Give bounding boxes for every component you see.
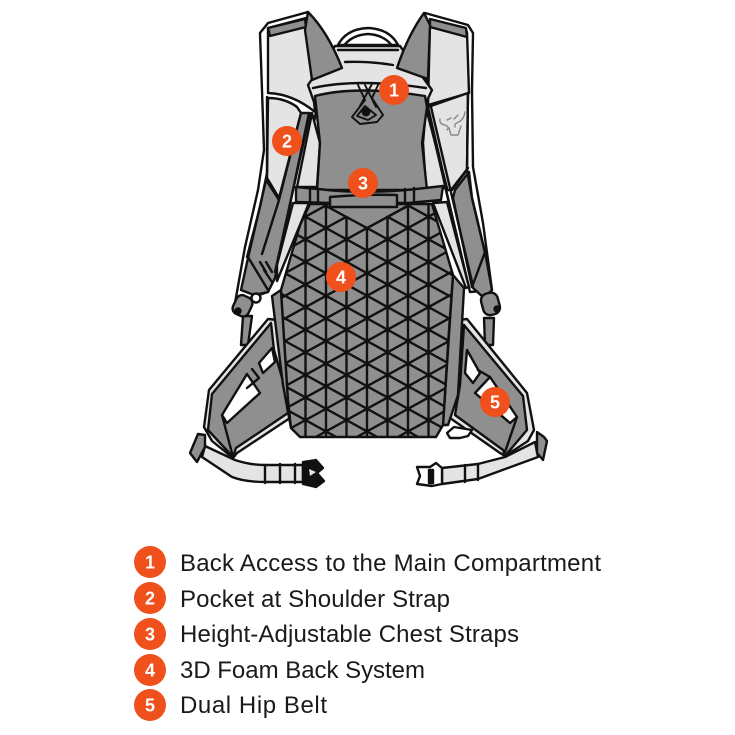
left hip belt xyxy=(190,434,324,487)
foam lattice xyxy=(282,205,452,436)
left strap buckle xyxy=(231,293,260,318)
legend item 1: Back Access to the Main Compartment xyxy=(180,550,601,577)
right hip belt xyxy=(417,432,547,486)
right shoulder strap xyxy=(423,13,492,298)
legend item 2: 2 xyxy=(145,588,155,608)
legend item 4: 4 xyxy=(145,660,155,680)
callout 5 on illustration xyxy=(480,387,510,417)
callout 3 on illustration xyxy=(348,168,378,198)
central back panel with top band xyxy=(308,45,432,190)
left light wedge xyxy=(277,203,309,281)
right shoulder dark wing xyxy=(397,13,430,79)
legend item 1: 1 xyxy=(145,552,155,572)
right hip wing xyxy=(450,318,534,456)
legend item 3: 3 xyxy=(145,624,155,644)
callout 1 on illustration: 1 xyxy=(389,80,399,100)
left hip wing xyxy=(204,316,290,458)
callout 4 on illustration: 4 xyxy=(336,268,346,288)
legend item 3: Height-Adjustable Chest Straps xyxy=(180,621,519,648)
legend item 5: 5 xyxy=(145,696,155,716)
callout 4 on illustration xyxy=(326,262,356,292)
left shoulder dark wing xyxy=(305,12,342,80)
backpack illustration xyxy=(190,12,547,525)
chest strap xyxy=(296,186,443,207)
left shoulder strap xyxy=(235,12,320,303)
right strap buckle xyxy=(479,291,502,317)
callout 3 on illustration: 3 xyxy=(358,174,368,194)
legend item 5 xyxy=(134,689,327,721)
callout 1 on illustration xyxy=(379,75,409,105)
back foam panel xyxy=(270,202,474,440)
callout 2 on illustration: 2 xyxy=(282,132,292,152)
callout 5 on illustration: 5 xyxy=(490,392,500,412)
top carry handle xyxy=(337,28,399,47)
legend item 2: Pocket at Shoulder Strap xyxy=(180,586,450,613)
legend xyxy=(134,546,601,721)
callout 2 on illustration xyxy=(272,126,302,156)
legend item 5: Dual Hip Belt xyxy=(180,692,327,719)
zipper pull xyxy=(352,84,383,124)
legend item 4: 3D Foam Back System xyxy=(180,657,425,684)
right light wedge xyxy=(433,202,469,288)
